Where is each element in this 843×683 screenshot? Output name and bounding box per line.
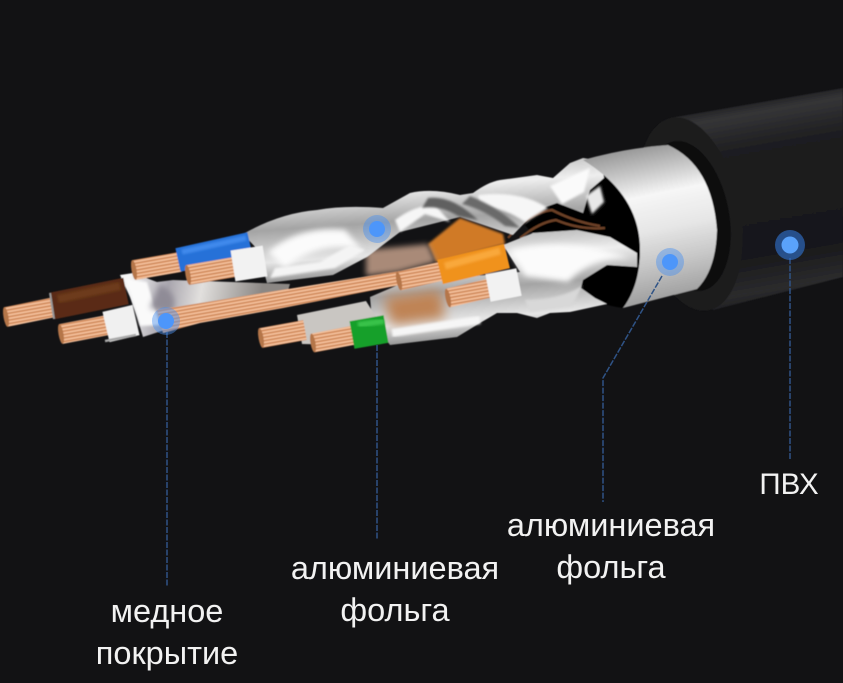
label: aluminium foil centre: фольга <box>340 592 451 628</box>
outer PVC jacket <box>622 88 843 320</box>
label: copper coating: медное <box>111 593 223 629</box>
upper foil pair <box>243 158 604 283</box>
lower-left foil behind brown pair <box>120 273 290 337</box>
label: aluminium foil right: алюминиевая <box>507 507 715 543</box>
label: aluminium foil right: фольга <box>556 549 667 585</box>
white wire left <box>57 320 136 344</box>
orange wire <box>395 251 507 291</box>
brown wire <box>2 286 126 327</box>
brown strands in interior <box>508 210 605 238</box>
dark cable interior <box>525 160 640 308</box>
bare copper conductor <box>157 271 400 333</box>
inner twisted orange and grey strands <box>366 218 505 276</box>
marker: copper coating <box>152 307 180 335</box>
cable illustration <box>2 88 843 353</box>
marker: PVC <box>775 230 805 260</box>
white wire upper <box>184 261 265 285</box>
leader lines <box>167 258 790 586</box>
label: PVC: ПВХ <box>759 468 819 501</box>
silver sleeve <box>583 145 717 308</box>
blue wire <box>130 238 250 280</box>
grey wire <box>257 301 378 348</box>
lower foil pair <box>370 230 637 345</box>
green wire <box>309 321 386 353</box>
white wire lower <box>444 282 519 308</box>
label: copper coating: покрытие <box>96 635 238 671</box>
marker: foil pair <box>363 215 391 243</box>
label: aluminium foil centre: алюминиевая <box>291 550 499 586</box>
marker: foil sleeve <box>656 248 684 276</box>
